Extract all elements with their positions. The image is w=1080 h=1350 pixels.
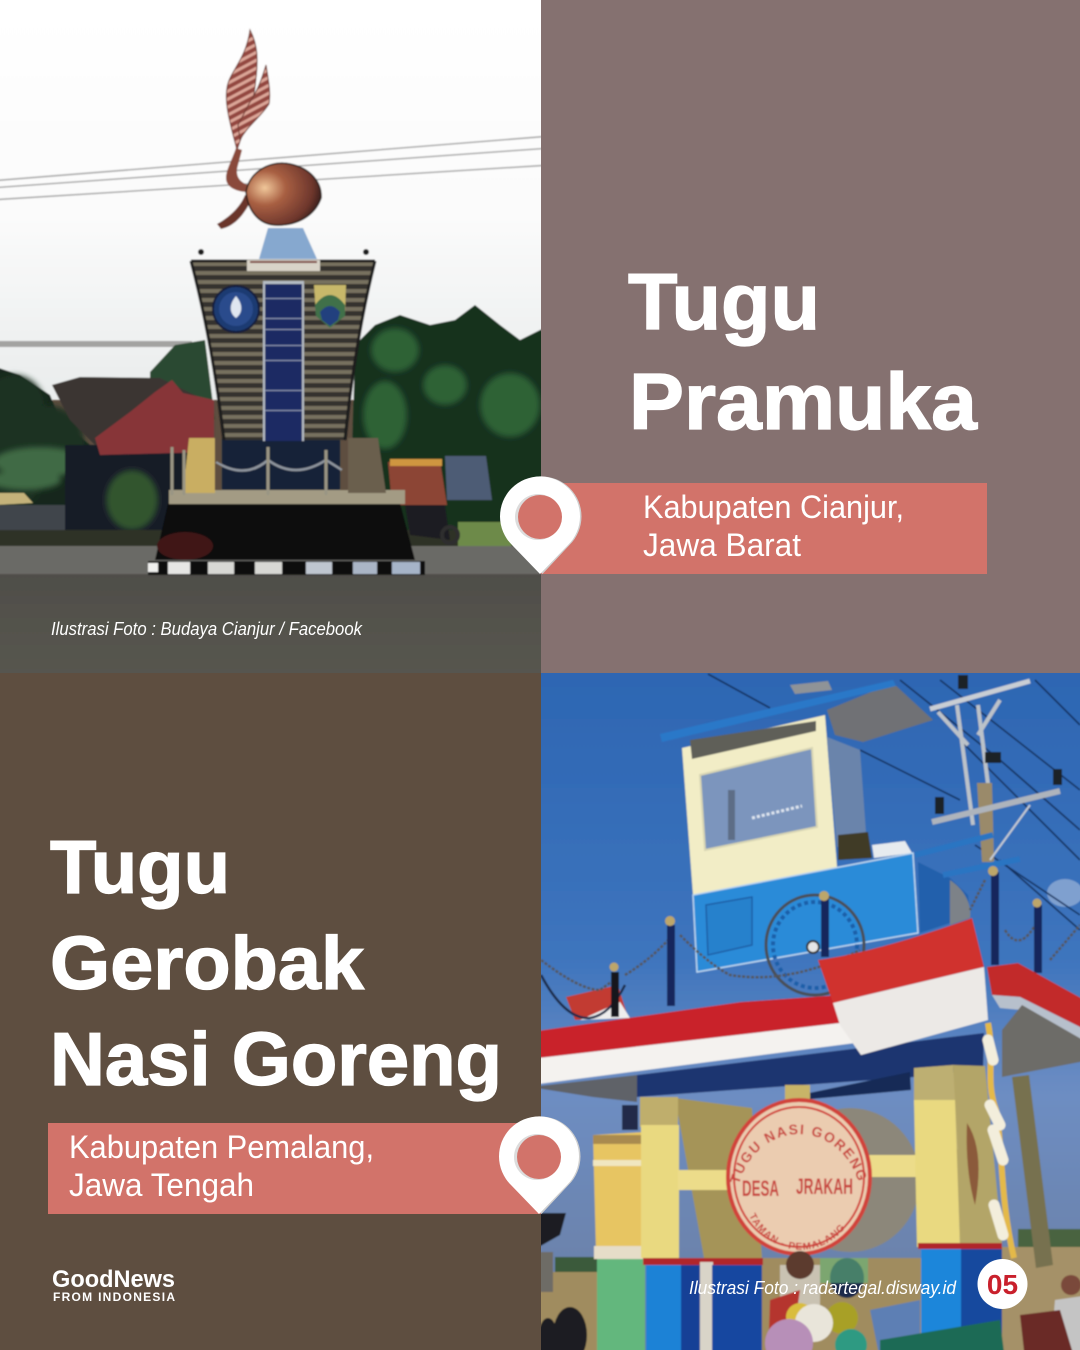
dark object left	[530, 1213, 566, 1252]
right pillar blue base light	[921, 1249, 961, 1350]
stage posts	[172, 447, 326, 495]
post finials	[610, 866, 1042, 972]
platform top	[169, 490, 405, 504]
cart window	[700, 748, 817, 850]
monument finials	[198, 249, 369, 255]
roof underside left	[530, 1075, 637, 1102]
cart door inset	[706, 897, 752, 955]
sky	[0, 0, 560, 400]
brace	[990, 805, 1030, 860]
roof red band	[530, 995, 840, 1059]
yellow bar left	[678, 1170, 730, 1190]
motorbike	[405, 505, 458, 543]
pole lower	[977, 783, 994, 862]
pole lattice	[938, 700, 1000, 825]
title: Tugu Pramuka	[628, 257, 978, 446]
decorative gold and white garland	[988, 1023, 1014, 1258]
pramuka badge	[213, 286, 259, 332]
insulators	[935, 675, 1062, 814]
blue arm lower	[943, 859, 1020, 875]
red tile roof	[95, 380, 214, 455]
back post right	[1012, 1075, 1053, 1268]
cart blue lower body	[693, 853, 918, 972]
right roof red edge	[987, 963, 1080, 1032]
shelter body	[0, 505, 65, 532]
icon: location pin bottom	[499, 1116, 580, 1214]
balloons	[765, 1302, 867, 1350]
monument base	[155, 503, 415, 560]
blue inscription panel	[263, 281, 304, 441]
left pillar side	[675, 1098, 762, 1258]
left stall yellow	[593, 1132, 645, 1252]
pin body	[500, 476, 580, 574]
badge number: 05	[987, 1269, 1018, 1300]
cart side glass	[827, 737, 867, 847]
overhead wires	[708, 674, 1080, 930]
red flag upper	[818, 918, 984, 1003]
location banner: Kabupaten Pemalang	[48, 1123, 541, 1214]
window reflected text	[752, 806, 802, 818]
lit foliage right	[363, 328, 540, 449]
gray disc behind cart	[950, 880, 970, 925]
pin hole shade	[515, 494, 561, 540]
white box on cart	[872, 841, 912, 858]
short leaf	[238, 65, 270, 140]
top crossarm	[930, 681, 1030, 709]
pin shadow edge	[500, 1116, 580, 1214]
chains	[541, 880, 1080, 990]
house dark roof	[52, 376, 194, 446]
orange vehicle	[388, 460, 447, 505]
cart cream body	[682, 715, 837, 895]
left background foliage near monument	[150, 340, 215, 420]
left pillar blue base dark	[681, 1265, 701, 1350]
curb stripes	[148, 561, 425, 575]
lower road	[0, 574, 541, 673]
gray lamp column left	[530, 1252, 553, 1292]
horizon wall strip	[0, 341, 192, 347]
monument slatted body	[192, 261, 374, 440]
lighter foliage left	[0, 444, 66, 494]
small flag white	[580, 1002, 630, 1020]
icon: location pin top	[500, 476, 582, 574]
red line on bar	[250, 261, 317, 263]
emblem lower text: TAMAN - PEMALANG	[750, 1212, 844, 1251]
location text line two: Jawa Tengah	[69, 1167, 254, 1203]
left pillar top	[640, 1097, 678, 1127]
logo tagline: FROM INDONESIA	[53, 1290, 175, 1304]
monument edges	[191, 261, 375, 440]
carved medallion	[967, 1123, 979, 1205]
pin shadow edge	[501, 476, 582, 574]
green bush	[106, 470, 158, 530]
field center	[755, 1258, 925, 1350]
stall white stripe	[593, 1160, 645, 1166]
emblem center text right: JRAKAH	[796, 1174, 853, 1199]
crowd left	[538, 1307, 587, 1350]
emblem inner ring	[734, 1107, 864, 1247]
power lines	[0, 136, 551, 200]
gold panel left	[183, 438, 215, 493]
pin hole shade	[514, 1134, 560, 1180]
caption: top photo credit: Ilustrasi Foto : Budaya Cianjur / Facebook	[51, 619, 363, 639]
right pillar front	[914, 1100, 960, 1247]
bottles	[838, 832, 872, 860]
stall base stripe	[594, 1246, 645, 1259]
cart blue side panel rear	[918, 862, 970, 933]
location text line one: Kabupaten Pemalang,	[69, 1129, 374, 1165]
page number badge	[978, 1259, 1028, 1309]
brown panel right	[348, 438, 386, 493]
emblem disc	[728, 1100, 870, 1254]
left pillar red stripe	[643, 1258, 763, 1265]
stall green base	[597, 1259, 645, 1350]
solar box on roof	[790, 681, 832, 694]
blue arm upper	[915, 835, 993, 855]
window post	[728, 790, 735, 840]
left pillar blue base light	[646, 1265, 681, 1350]
red bush at base	[157, 532, 213, 560]
title: Tugu Gerobak Nasi Goreng	[50, 825, 502, 1101]
cart roof underside	[827, 683, 933, 742]
title line: Tugu: Tugu	[628, 257, 820, 346]
field left	[530, 1272, 601, 1350]
distant tree line right	[1018, 1229, 1080, 1249]
pin hole	[518, 495, 562, 539]
navy posts	[671, 872, 1038, 1006]
stage dark block	[222, 438, 340, 490]
location banner: Kabupaten Cianjur	[541, 483, 987, 574]
blue pedestal	[259, 228, 317, 259]
cart vent	[690, 721, 816, 759]
beam dark slots	[790, 1072, 911, 1100]
dark ground band under trees	[0, 530, 550, 546]
black post	[611, 972, 619, 1017]
trees on the left	[0, 375, 84, 510]
grass patch	[458, 522, 512, 546]
logo wordmark: GoodNews	[52, 1266, 175, 1293]
stage chains	[216, 460, 342, 471]
location text line two: Jawa Barat	[643, 527, 801, 563]
cart roof blue strip	[660, 680, 896, 742]
emblem upper text: TUGU NASI GORENG	[729, 1124, 867, 1182]
panel: brown background bottom left	[0, 673, 541, 1350]
crowd center figures	[768, 1251, 920, 1350]
photo: Tugu Gerobak Nasi Goreng	[541, 673, 1080, 1350]
emblem center text left: DESA	[742, 1176, 779, 1201]
title line: Tugu: Tugu	[50, 825, 230, 909]
regency shield	[314, 285, 346, 328]
location text line one: Kabupaten Cianjur,	[643, 489, 904, 525]
orange vehicle roof	[390, 459, 442, 466]
emblem: Tugu Nasi Goreng	[725, 1097, 873, 1256]
yellow bar right	[868, 1155, 920, 1177]
roof white band	[530, 1023, 855, 1085]
far center column	[785, 1085, 810, 1105]
utility pole	[930, 675, 1062, 862]
small yellow shelter	[0, 493, 33, 505]
pin hole	[517, 1135, 561, 1179]
house wall	[64, 444, 187, 531]
tree mass on the right	[352, 304, 541, 531]
field right	[985, 1247, 1080, 1350]
small flag behind chain	[566, 985, 628, 1020]
stall brown top band	[593, 1135, 645, 1144]
panel: taupe background top right	[541, 0, 1080, 673]
lower crossarm	[932, 791, 1060, 822]
right pillar blue base dark	[961, 1249, 1002, 1350]
left pillar white strip	[700, 1262, 713, 1350]
tree mass on the left	[0, 368, 90, 506]
title line: Pramuka: Pramuka	[629, 357, 978, 446]
onion sculpture	[217, 30, 321, 229]
blue truck	[445, 456, 492, 500]
tall leaf	[226, 30, 257, 150]
right roof white fascia	[992, 995, 1080, 1048]
left pillar front	[641, 1125, 679, 1258]
banner bar	[541, 483, 987, 574]
banner bar	[48, 1123, 541, 1214]
second column base	[712, 1265, 762, 1350]
right pillar red stripe	[918, 1243, 1002, 1249]
crowd right	[880, 1275, 1080, 1350]
dark rope	[541, 975, 625, 1018]
flag crossed post	[622, 1105, 638, 1130]
upper road strip	[0, 546, 550, 576]
right pillar top	[914, 1065, 958, 1150]
pin body	[499, 1116, 579, 1214]
bulb	[246, 163, 321, 225]
stem	[226, 148, 252, 192]
pedestal top bar	[247, 260, 320, 271]
title line: Nasi Goreng: Nasi Goreng	[50, 1017, 502, 1101]
logo: GoodNews from Indonesia	[52, 1266, 175, 1304]
cart wheel	[766, 895, 864, 995]
gray disc behind emblem	[780, 1108, 920, 1252]
root tail	[217, 195, 252, 229]
title line: Gerobak: Gerobak	[50, 921, 364, 1005]
photo: Tugu Pramuka monument	[0, 0, 560, 683]
right pillar side	[953, 1065, 1002, 1247]
pale cloud lower right of sky	[1047, 879, 1080, 907]
distant tree line left	[555, 1257, 600, 1272]
blue sky	[530, 663, 1080, 1350]
roof navy beam	[637, 1033, 984, 1097]
badge circle	[978, 1259, 1028, 1309]
right roof underside	[1002, 1005, 1080, 1077]
caption: bottom photo credit: Ilustrasi Foto : radartegal.disway.id	[689, 1278, 957, 1298]
white flag lower	[833, 967, 988, 1055]
